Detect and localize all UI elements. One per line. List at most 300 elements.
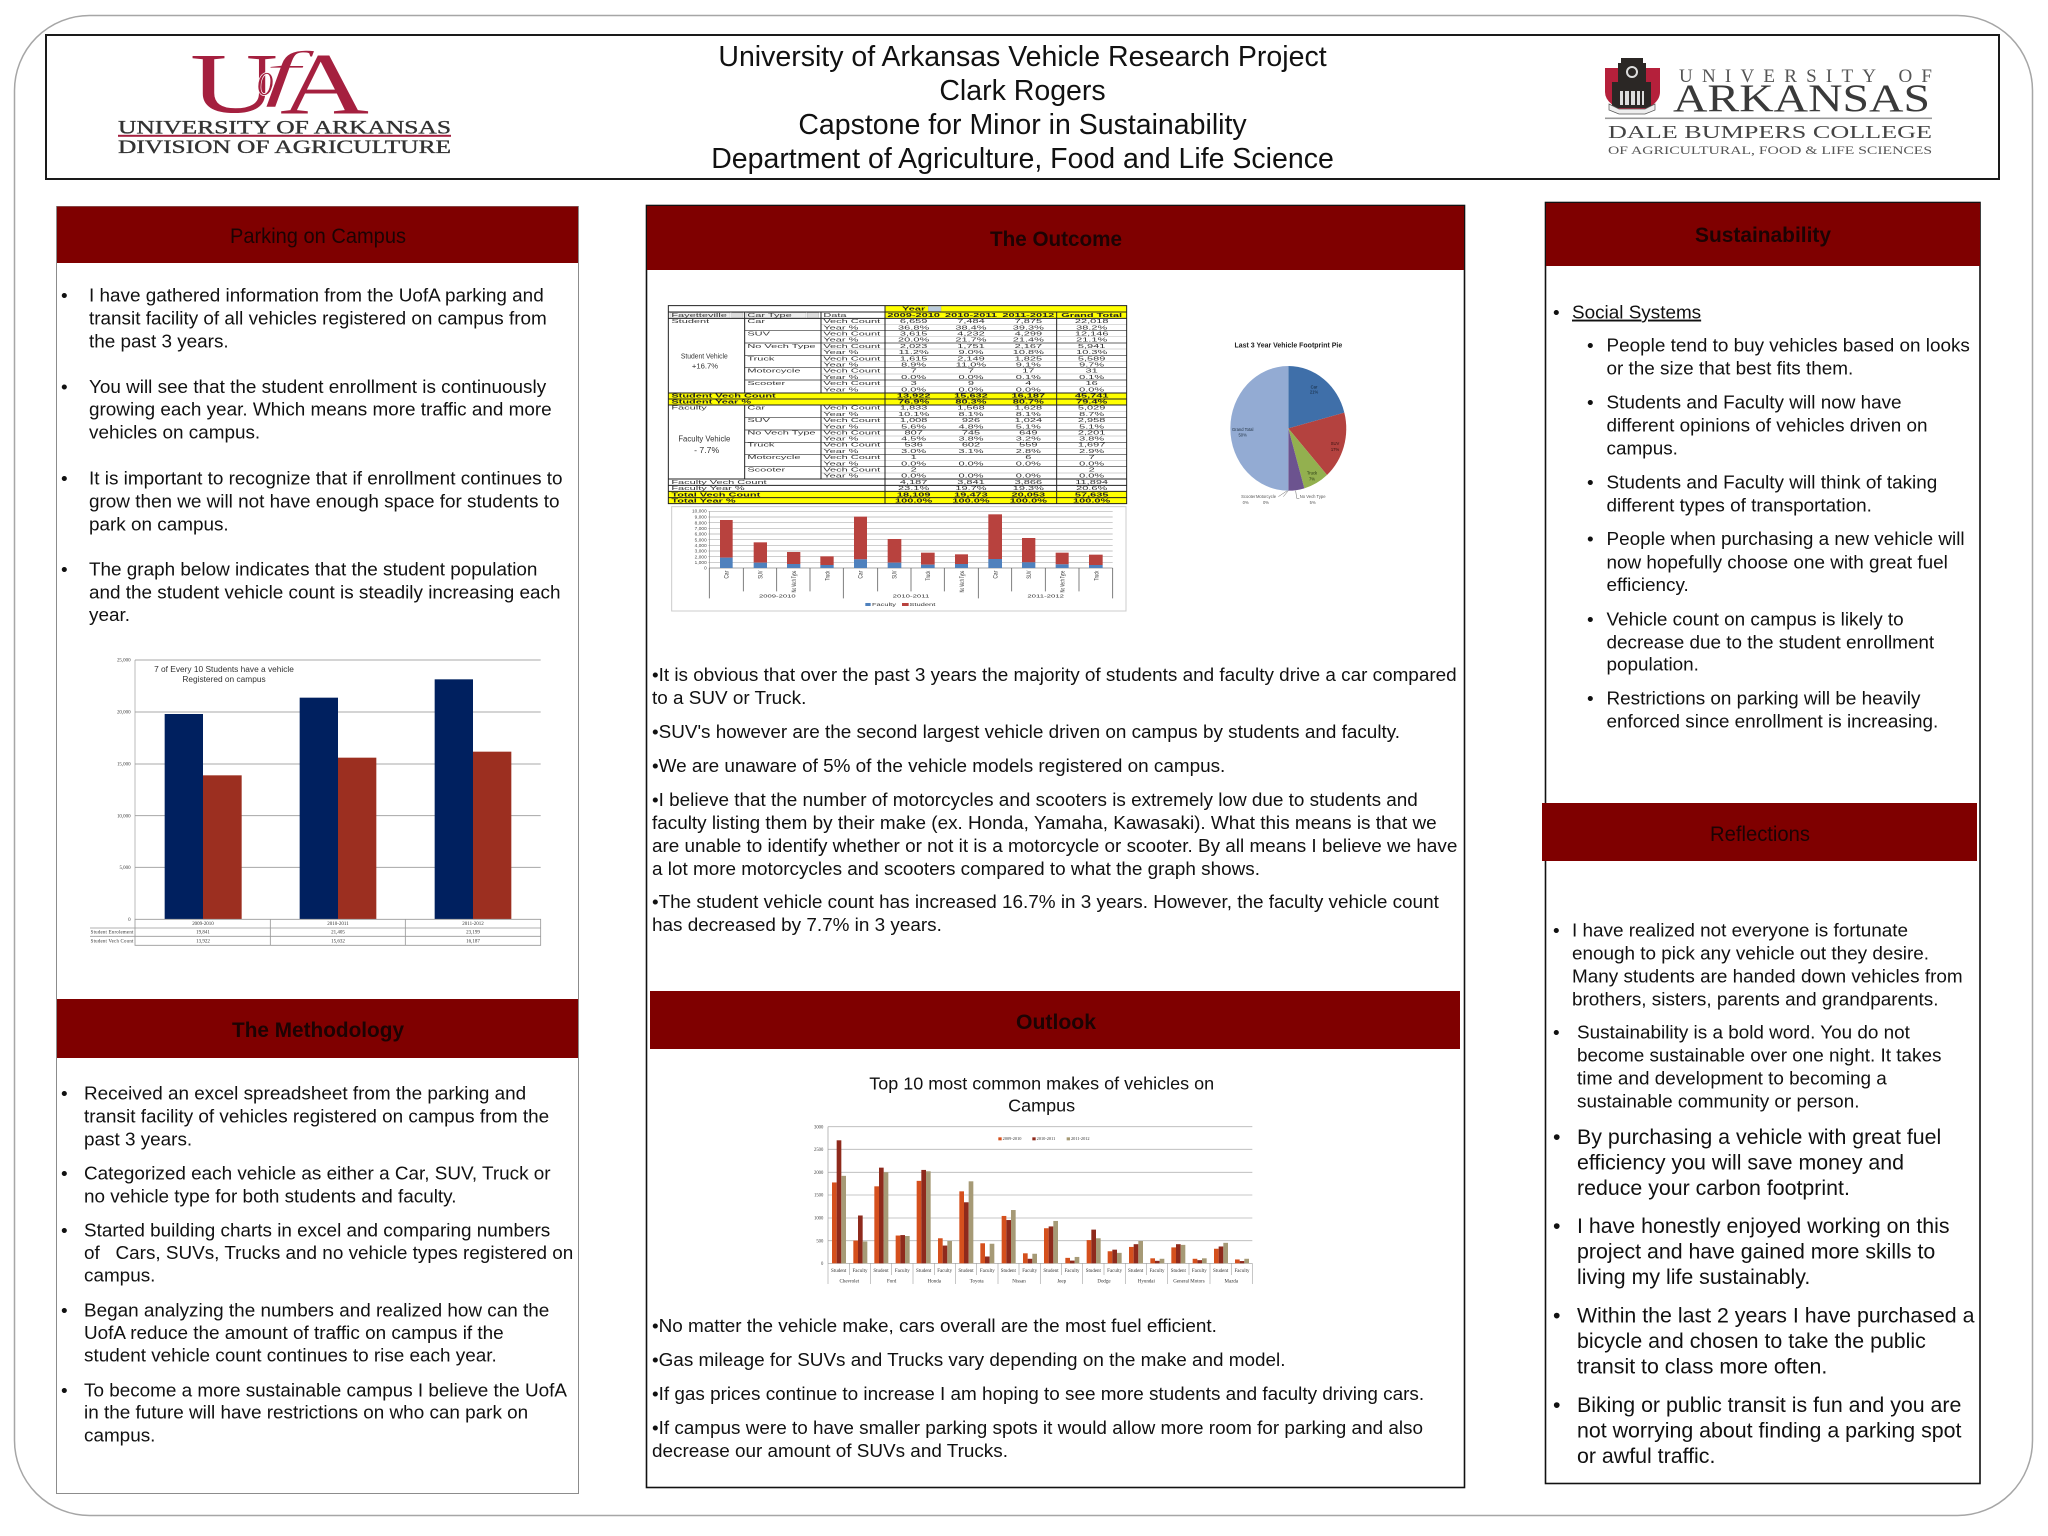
data table: vehicle counts by type and year: 39.3% [1013, 324, 1044, 331]
bar chart: student enrollment vs vehicle count: 13,922 [196, 939, 210, 944]
text block: methodology bullets: • [61, 1221, 68, 1242]
data table: vehicle counts by type and year: 11,894 [1075, 479, 1108, 485]
data table: vehicle counts by type and year: 4,232 [957, 330, 985, 337]
data table: vehicle counts by type and year: Vech Count [823, 355, 881, 362]
data table: vehicle counts by type and year: 9 [968, 380, 974, 386]
data table: vehicle counts by type and year: 0.0% [958, 386, 984, 393]
data table: vehicle counts by type and year: 23.1% [898, 485, 930, 491]
data table: vehicle counts by type and year: 1,697 [1078, 442, 1106, 448]
data table: vehicle counts by type and year: 9.7% [1079, 361, 1105, 368]
text block: reflections bullets: • [1553, 1304, 1560, 1328]
data table: vehicle counts by type and year: 0.1% [1079, 374, 1105, 380]
data table: vehicle counts by type and year: No Vech Type [747, 429, 816, 436]
bar chart: student enrollment vs vehicle count: 23,199 [466, 931, 480, 936]
data table: vehicle counts by type and year: 16,187 [1012, 392, 1045, 399]
text block: social systems bullets: different opinions of vehicles driven on [1606, 416, 1928, 437]
bar chart: top 10 vehicle makes: 1000 [814, 1217, 824, 1222]
text block: parking bullets: grow then we will not have enough space for students to [89, 492, 559, 513]
data table: vehicle counts by type and year: 31 [1086, 368, 1098, 374]
data table: vehicle counts by type and year: 1 [911, 454, 917, 460]
bar chart: top 10 vehicle makes: 1500 [814, 1194, 824, 1199]
data table: vehicle counts by type and year: Vech Count [823, 405, 881, 411]
data table: vehicle counts by type and year: 10.1% [898, 411, 930, 417]
text block: methodology bullets: transit facility of vehicles registered on campus from the [84, 1107, 549, 1128]
data table: vehicle counts by type and year: 7 [968, 368, 974, 374]
bar chart: top 10 vehicle makes: 3000 [814, 1125, 824, 1130]
text block: methodology bullets: • [61, 1301, 68, 1322]
text block: parking bullets: • [61, 469, 68, 490]
text block: social systems bullets: different types of transportation. [1606, 496, 1872, 517]
data table: vehicle counts by type and year: 0.0% [1079, 473, 1105, 479]
bar chart: student enrollment vs vehicle count: 15,632 [331, 939, 345, 944]
text block: reflections bullets: Biking or public transit is fun and you are [1577, 1393, 1961, 1417]
data table: vehicle counts by type and year: Total Vech Count [671, 491, 760, 498]
text block: reflections bullets: brothers, sisters, parents and grandparents. [1572, 990, 1938, 1011]
text block: social systems bullets: Students and Faculty will think of taking [1606, 473, 1937, 494]
data table: vehicle counts by type and year: Car [747, 318, 765, 324]
pie chart: last 3 year vehicle footprint: 0% [1243, 500, 1249, 505]
text block: social systems bullets: • [1553, 303, 1560, 324]
text block: outcome findings: are unable to identify whether or not it is a motorcycle or scooter. By all means I believe we have [652, 836, 1457, 857]
bar chart: top 10 vehicle makes: Mazda [1225, 1279, 1239, 1284]
data table: vehicle counts by type and year: 21.7% [955, 337, 987, 343]
header band [46, 35, 1999, 179]
text block: outlook points [652, 1316, 1424, 1462]
data table: vehicle counts by type and year: 7 [1089, 454, 1095, 460]
data table: vehicle counts by type and year: Truck [747, 442, 775, 448]
stacked bar chart: faculty and student vehicles by type: Faculty [872, 602, 897, 607]
logo: UofA Division of Agriculture: UNIVERSITY OF ARKANSAS [118, 118, 451, 138]
text block: reflections bullets: living my life sustainably. [1577, 1265, 1810, 1289]
bar chart: top 10 vehicle makes: Top 10 most common makes of vehicles on [869, 1073, 1214, 1093]
text block: methodology bullets: Categorized each vehicle as either a Car, SUV, Truck or [84, 1164, 551, 1185]
stacked bar chart: faculty and student vehicles by type: 2009-2010 [759, 593, 796, 598]
data table: vehicle counts by type and year: 649 [1019, 429, 1038, 436]
text block: outlook points: decrease our amount of SUVs and Trucks. [652, 1441, 1008, 1462]
logo: UofA Division of Agriculture: o [257, 53, 274, 106]
text block: social systems bullets [1553, 303, 1970, 733]
data table: vehicle counts by type and year: Faculty Vehicle [678, 434, 730, 444]
text block: reflections bullets [1553, 921, 1975, 1468]
bar chart: top 10 vehicle makes: Student [1213, 1269, 1229, 1274]
data table: vehicle counts by type and year: Year % [823, 436, 859, 442]
data table: vehicle counts by type and year: 745 [962, 429, 980, 436]
text block: social systems bullets: • [1587, 610, 1594, 631]
logo: Dale Bumpers College: UNIVERSITY OF [1679, 66, 1932, 87]
bar chart: top 10 vehicle makes: Hyundai [1138, 1279, 1156, 1284]
bar chart: top 10 vehicle makes: Faculty [1235, 1269, 1250, 1274]
data table: vehicle counts by type and year: 3 [911, 380, 917, 386]
data table: vehicle counts by type and year: 8.1% [958, 411, 984, 417]
data table: vehicle counts by type and year: 10.8% [1013, 349, 1044, 355]
data table: vehicle counts by type and year: 2,023 [900, 343, 928, 349]
text block: methodology bullets: Started building charts in excel and comparing numbers [84, 1221, 550, 1242]
data table: vehicle counts by type and year: 0.0% [1079, 460, 1105, 467]
data table: vehicle counts by type and year: 3.1% [958, 448, 984, 454]
pie chart: last 3 year vehicle footprint: SUV [1331, 441, 1339, 446]
text block: social systems bullets: decrease due to the student enrollment [1606, 633, 1935, 654]
text block: methodology bullets: • [61, 1164, 68, 1185]
text block: parking bullets: • [61, 377, 68, 398]
data table: vehicle counts by type and year: 8.7% [1079, 411, 1105, 417]
stacked bar chart: faculty and student vehicles by type: 3,000 [695, 549, 707, 554]
text block: outcome findings: •The student vehicle count has increased 16.7% in 3 years. However, the faculty vehicle count [652, 892, 1440, 913]
bar chart: student enrollment vs vehicle count: 25,000 [117, 659, 131, 664]
data table: vehicle counts by type and year: 4.5% [901, 436, 927, 442]
text block: reflections bullets: not worrying about finding a parking spot [1577, 1418, 1961, 1442]
data table: vehicle counts by type and year: 20.6% [1076, 485, 1108, 491]
data table: vehicle counts by type and year: 5,941 [1078, 343, 1106, 349]
stacked bar chart: faculty and student vehicles by type: 10,000 [692, 509, 707, 514]
data table: vehicle counts by type and year: Data [823, 312, 847, 318]
data table: vehicle counts by type and year: 2.9% [1079, 448, 1105, 454]
text block: methodology bullets: Received an excel spreadsheet from the parking and [84, 1084, 526, 1105]
bar chart: top 10 vehicle makes: 2000 [814, 1171, 824, 1176]
data table: vehicle counts by type and year: Student Vehicle [681, 351, 728, 360]
pie chart: last 3 year vehicle footprint: No Vech Type [1300, 494, 1326, 499]
bar chart: top 10 vehicle makes: Faculty [1065, 1269, 1080, 1274]
data table: vehicle counts by type and year: 21.4% [1013, 337, 1044, 343]
data table: vehicle counts by type and year: 5.6% [901, 423, 927, 430]
bar chart: student enrollment vs vehicle count [90, 659, 541, 945]
data table: vehicle counts by type and year: 12,146 [1075, 330, 1109, 337]
data table: vehicle counts by type and year: 4.8% [958, 423, 984, 430]
text block: social systems bullets: campus. [1606, 439, 1678, 460]
text block: methodology bullets [61, 1084, 573, 1447]
text block: social systems bullets: Restrictions on parking will be heavily [1606, 689, 1921, 710]
data table: vehicle counts by type and year: 2 [1089, 466, 1095, 473]
pie chart: last 3 year vehicle footprint: Truck [1307, 470, 1318, 475]
stacked bar chart: faculty and student vehicles by type: 1,000 [695, 560, 707, 565]
logo: UofA Division of Agriculture: DIVISION OF AGRICULTURE [118, 138, 451, 158]
data table: vehicle counts by type and year: Year % [823, 448, 859, 454]
data table: vehicle counts by type and year: Faculty Year % [671, 485, 745, 491]
pie chart: last 3 year vehicle footprint: Scooter [1241, 494, 1256, 499]
text block: outlook points: •If gas prices continue to increase I am hoping to see more students and faculty driving cars. [652, 1384, 1424, 1405]
text block: reflections bullets: Sustainability is a bold word. You do not [1577, 1023, 1911, 1044]
bar chart: top 10 vehicle makes: Student [1128, 1269, 1144, 1274]
bar chart: student enrollment vs vehicle count: Student Enrolement [91, 931, 134, 936]
stacked bar chart: faculty and student vehicles by type: SUV [758, 570, 765, 579]
data table: vehicle counts by type and year: Year % [823, 374, 859, 380]
data table: vehicle counts by type and year: 2,958 [1078, 417, 1106, 423]
text block: methodology bullets: in the future will have restrictions on who can park on [84, 1403, 528, 1424]
data table: vehicle counts by type and year: 8.9% [901, 361, 927, 368]
data table: vehicle counts by type and year: Vech Count [823, 417, 881, 423]
data table: vehicle counts by type and year: 21.1% [1076, 337, 1108, 343]
title block: University of Arkansas Vehicle Research Project [718, 41, 1327, 73]
text block: social systems bullets: • [1587, 473, 1594, 494]
stacked bar chart: faculty and student vehicles by type: 4,000 [695, 543, 707, 548]
stacked bar chart: faculty and student vehicles by type: 8,000 [695, 520, 707, 525]
bar chart: top 10 vehicle makes: Student [1171, 1269, 1187, 1274]
text block: reflections bullets: reduce your carbon footprint. [1577, 1176, 1850, 1200]
stacked bar chart: faculty and student vehicles by type [672, 507, 1126, 611]
logo: UofA Division of Agriculture [118, 35, 451, 158]
stacked bar chart: faculty and student vehicles by type: Truck [1093, 570, 1100, 581]
data table: vehicle counts by type and year: +16.7% [692, 361, 718, 370]
data table: vehicle counts by type and year: 100.0% [895, 497, 933, 504]
text block: outcome findings: •I believe that the number of motorcycles and scooters is extremely low due to students and [652, 790, 1418, 811]
bar chart: top 10 vehicle makes: Student [873, 1269, 889, 1274]
heading: The Outcome [647, 206, 1464, 270]
data table: vehicle counts by type and year: 0.0% [901, 386, 927, 393]
text block: reflections bullets: • [1553, 1214, 1560, 1238]
title block [711, 41, 1334, 175]
data table: vehicle counts by type and year: Year % [823, 349, 859, 355]
bar chart: top 10 vehicle makes: Ford [887, 1279, 897, 1284]
heading: Parking on Campus: Parking on Campus [230, 224, 406, 248]
data table: vehicle counts by type and year: 3.0% [901, 448, 927, 454]
data table: vehicle counts by type and year: Motorcycle [747, 368, 801, 374]
bar chart: student enrollment vs vehicle count: Registered on campus [182, 674, 266, 684]
text block: outcome findings: •SUV's however are the second largest vehicle driven on campus by students and faculty. [652, 722, 1400, 743]
text block: reflections bullets: efficiency you will save money and [1577, 1150, 1904, 1174]
data table: vehicle counts by type and year: Student [671, 318, 710, 324]
text block: parking bullets: • [61, 560, 68, 581]
text block: reflections bullets: I have realized not everyone is fortunate [1572, 921, 1908, 942]
text block: outlook points: •If campus were to have smaller parking spots it would allow more room for parking and also [652, 1418, 1423, 1439]
text block: social systems bullets: Vehicle count on campus is likely to [1606, 610, 1904, 631]
text block: parking bullets: I have gathered information from the UofA parking and [89, 286, 544, 307]
text block: parking bullets: park on campus. [89, 515, 229, 536]
text block: parking bullets: The graph below indicates that the student population [89, 560, 537, 581]
logo: Dale Bumpers College [1605, 58, 1932, 157]
data table: vehicle counts by type and year: 76.9% [898, 398, 930, 405]
data table: vehicle counts by type and year: Student Year % [671, 398, 751, 405]
data table: vehicle counts by type and year: 2 [911, 466, 917, 473]
bar chart: student enrollment vs vehicle count: 2011-2012 [462, 922, 484, 927]
data table: vehicle counts by type and year: 79.4% [1076, 398, 1108, 405]
data table: vehicle counts by type and year: 16 [1086, 380, 1098, 386]
stacked bar chart: faculty and student vehicles by type: 0 [704, 566, 707, 571]
data table: vehicle counts by type and year: 5.1% [1016, 423, 1041, 430]
text block: methodology bullets: • [61, 1084, 68, 1105]
bar chart: top 10 vehicle makes: Faculty [853, 1269, 868, 1274]
bar chart: top 10 vehicle makes: Student [1043, 1269, 1059, 1274]
heading: The Methodology [57, 999, 578, 1058]
heading: The Outcome: The Outcome [990, 227, 1122, 251]
data table: vehicle counts by type and year: 5.1% [1079, 423, 1105, 430]
bar chart: top 10 vehicle makes: Faculty [895, 1269, 910, 1274]
data table: vehicle counts by type and year: Vech Count [823, 380, 881, 386]
panel: right column (Sustainability and Reflections) [1542, 202, 1980, 1484]
data table: vehicle counts by type and year: 17 [1022, 368, 1035, 374]
heading: Sustainability: Sustainability [1695, 223, 1831, 247]
bar chart: top 10 vehicle makes: 2010-2011 [1037, 1136, 1055, 1141]
data table: vehicle counts by type and year: 0.0% [1016, 460, 1041, 467]
bar chart: student enrollment vs vehicle count: 2009-2010 [192, 922, 214, 927]
data table: vehicle counts by type and year: 20.0% [898, 337, 930, 343]
text block: reflections bullets: Within the last 2 years I have purchased a [1577, 1304, 1975, 1328]
text block: methodology bullets: • [61, 1381, 68, 1402]
text block: outcome findings: •It is obvious that over the past 3 years the majority of students and faculty drive a car compared [652, 665, 1457, 686]
text block: social systems bullets: enforced since enrollment is increasing. [1606, 712, 1938, 733]
panel: middle column (Outcome and Outlook) [646, 206, 1464, 1488]
text block: social systems bullets: People tend to buy vehicles based on looks [1606, 336, 1970, 357]
heading: Parking on Campus [57, 206, 578, 263]
bar chart: top 10 vehicle makes: Jeep [1057, 1279, 1067, 1284]
data table: vehicle counts by type and year: 13,922 [897, 392, 931, 399]
bar chart: top 10 vehicle makes: Faculty [1022, 1269, 1038, 1274]
pie chart: last 3 year vehicle footprint [1230, 342, 1346, 505]
data table: vehicle counts by type and year: SUV [747, 330, 770, 337]
heading: Sustainability [1546, 203, 1980, 266]
data table: vehicle counts by type and year: 2,149 [957, 355, 985, 362]
text block: social systems bullets: efficiency. [1606, 575, 1689, 596]
text block: social systems bullets: population. [1606, 655, 1699, 676]
data table: vehicle counts by type and year: 0.0% [1079, 386, 1105, 393]
stacked bar chart: faculty and student vehicles by type: 2,000 [695, 554, 707, 559]
data table: vehicle counts by type and year: 80.7% [1013, 398, 1044, 405]
stacked bar chart: faculty and student vehicles by type: Student [909, 602, 936, 607]
data table: vehicle counts by type and year: Vech Count [823, 318, 881, 324]
pie chart: last 3 year vehicle footprint: 17% [1331, 447, 1339, 452]
text block: parking bullets: year. [89, 605, 130, 626]
data table: vehicle counts by type and year: 3,866 [1015, 479, 1042, 485]
data table: vehicle counts by type and year: Car Type [747, 312, 792, 318]
text block: parking bullets: vehicles on campus. [89, 423, 260, 444]
text block: social systems bullets: • [1587, 689, 1594, 710]
stacked bar chart: faculty and student vehicles by type: No Vech Type [959, 571, 966, 592]
data table: vehicle counts by type and year: 57,635 [1075, 491, 1109, 498]
data table: vehicle counts by type and year: 9.0% [958, 349, 984, 355]
text block: methodology bullets: of Cars, SUVs, Trucks and no vehicle types registered on [84, 1243, 573, 1264]
data table: vehicle counts by type and year: 7,875 [1015, 318, 1042, 324]
stacked bar chart: faculty and student vehicles by type: 2010-2011 [893, 593, 930, 598]
data table: vehicle counts by type and year: 15,632 [954, 392, 988, 399]
bar chart: student enrollment vs vehicle count: 20,000 [117, 711, 131, 716]
text block: reflections bullets: project and have gained more skills to [1577, 1240, 1935, 1264]
data table: vehicle counts by type and year: 100.0% [1010, 497, 1047, 504]
data table: vehicle counts by type and year: Year % [823, 361, 859, 368]
data table: vehicle counts by type and year: 4,187 [900, 479, 928, 485]
bar chart: student enrollment vs vehicle count: Student Vech Count [91, 939, 134, 944]
stacked bar chart: faculty and student vehicles by type: 7,000 [695, 526, 707, 531]
text block: parking bullets: growing each year. Which means more traffic and more [89, 400, 552, 421]
text block: social systems bullets: now hopefully choose one with great fuel [1606, 553, 1948, 574]
data table: vehicle counts by type and year: 6 [1025, 454, 1032, 460]
data table: vehicle counts by type and year: Faculty Vech Count [671, 479, 767, 485]
data table: vehicle counts by type and year: 0.0% [901, 374, 927, 380]
data table: vehicle counts by type and year: 45,741 [1075, 392, 1109, 399]
bar chart: top 10 vehicle makes: Toyota [970, 1279, 984, 1284]
text block: methodology bullets: campus. [84, 1266, 155, 1287]
heading: Outlook: Outlook [1016, 1010, 1096, 1034]
logo: Dale Bumpers College: DALE BUMPERS COLLEGE [1608, 122, 1932, 142]
data table: vehicle counts by type and year: 2011-2012 [1002, 312, 1055, 318]
data table: vehicle counts by type and year: 10.3% [1076, 349, 1108, 355]
data table: vehicle counts by type and year: 2010-2011 [945, 312, 997, 318]
data table: vehicle counts by type and year: 19.7% [955, 485, 987, 491]
title block: Department of Agriculture, Food and Life Science [711, 143, 1334, 175]
text block: outcome findings: •We are unaware of 5% of the vehicle models registered on campus. [652, 756, 1225, 777]
data table: vehicle counts by type and year: Year % [823, 337, 859, 343]
logo: Dale Bumpers College: OF AGRICULTURAL, FOOD & LIFE SCIENCES [1608, 145, 1932, 157]
text block: methodology bullets: UofA reduce the amount of traffic on campus if the [84, 1323, 504, 1344]
data table: vehicle counts by type and year: 2009-2010 [887, 312, 940, 318]
data table: vehicle counts by type and year: Year % [823, 423, 859, 430]
bar chart: top 10 vehicle makes [814, 1073, 1252, 1284]
bar chart: top 10 vehicle makes: Faculty [1192, 1269, 1207, 1274]
data table: vehicle counts by type and year: SUV [747, 417, 770, 423]
data table: vehicle counts by type and year: 0.0% [901, 473, 927, 479]
logo: UofA Division of Agriculture: f [264, 40, 316, 108]
text block: reflections bullets: • [1553, 1393, 1560, 1417]
data table: vehicle counts by type and year: 18,109 [897, 491, 931, 498]
data table: vehicle counts by type and year: Scooter [747, 380, 785, 386]
panel: left column (Parking on Campus and Methodology) [56, 206, 578, 1494]
text block: reflections bullets: or awful traffic. [1577, 1444, 1715, 1468]
pie chart: last 3 year vehicle footprint: 7% [1309, 477, 1315, 482]
text block: reflections bullets: bicycle and chosen to take the public [1577, 1329, 1926, 1353]
data table: vehicle counts by type and year: 20,053 [1012, 491, 1045, 498]
bar chart: top 10 vehicle makes: Student [958, 1269, 974, 1274]
data table: vehicle counts by type and year: 2,167 [1015, 343, 1042, 349]
stacked bar chart: faculty and student vehicles by type: 6,000 [695, 532, 707, 537]
text block: parking bullets: and the student vehicle count is steadily increasing each [89, 583, 561, 604]
data table: vehicle counts by type and year: 0.0% [958, 374, 984, 380]
pie chart: last 3 year vehicle footprint: Last 3 Year Vehicle Footprint Pie [1234, 342, 1342, 349]
data table: vehicle counts by type and year: 0.1% [1016, 374, 1041, 380]
data table: vehicle counts by type and year: 1,628 [1015, 405, 1042, 411]
text block: social systems bullets: Students and Faculty will now have [1606, 393, 1902, 414]
text block: methodology bullets: campus. [84, 1426, 155, 1447]
bar chart: top 10 vehicle makes: Faculty [1150, 1269, 1165, 1274]
bar chart: top 10 vehicle makes: 2009-2010 [1003, 1136, 1021, 1141]
data table: vehicle counts by type and year: 5,589 [1078, 355, 1106, 362]
logo: Dale Bumpers College: ARKANSAS [1673, 77, 1930, 120]
text block: reflections bullets: time and development to becoming a [1577, 1069, 1887, 1090]
data table: vehicle counts by type and year: 7,484 [957, 318, 985, 324]
bar chart: top 10 vehicle makes: Student [1001, 1269, 1017, 1274]
text block: parking bullets: the past 3 years. [89, 332, 229, 353]
data table: vehicle counts by type and year: No Vech Type [747, 343, 816, 349]
pie chart: last 3 year vehicle footprint: 21% [1310, 390, 1318, 395]
bar chart: top 10 vehicle makes: Nissan [1012, 1279, 1026, 1284]
data table: vehicle counts by type and year: 4,299 [1015, 330, 1042, 337]
data table: vehicle counts by type and year: Year % [823, 460, 859, 467]
bar chart: top 10 vehicle makes: Student [1086, 1269, 1102, 1274]
text block: reflections bullets: By purchasing a vehicle with great fuel [1577, 1125, 1941, 1149]
bar chart: top 10 vehicle makes: 500 [816, 1239, 824, 1244]
data table: vehicle counts by type and year: 7 [911, 368, 917, 374]
text block: social systems bullets: • [1587, 336, 1594, 357]
data table: vehicle counts by type and year: 0.0% [1016, 386, 1041, 393]
bar chart: student enrollment vs vehicle count: 21,405 [331, 931, 345, 936]
pie chart: last 3 year vehicle footprint: 0% [1263, 500, 1269, 505]
logo: UofA Division of Agriculture: U [190, 35, 278, 131]
data table: vehicle counts by type and year: 6,659 [900, 318, 928, 324]
bar chart: student enrollment vs vehicle count: 5,000 [119, 866, 131, 871]
data table: vehicle counts by type and year: 807 [904, 429, 923, 436]
text block: reflections bullets: transit to class more often. [1577, 1354, 1827, 1378]
bar chart: student enrollment vs vehicle count: 19,841 [196, 931, 210, 936]
data table: vehicle counts by type and year: 1,825 [1015, 355, 1042, 362]
logo: UofA Division of Agriculture: A [280, 36, 369, 134]
text block: reflections bullets: sustainable community or person. [1577, 1092, 1859, 1113]
data table: vehicle counts by type and year: Student Vech Count [671, 392, 776, 399]
stacked bar chart: faculty and student vehicles by type: Car [724, 570, 731, 579]
text block: outcome findings: to a SUV or Truck. [652, 688, 806, 709]
bar chart: student enrollment vs vehicle count: 2010-2011 [327, 922, 349, 927]
bar chart: top 10 vehicle makes: Campus [1008, 1096, 1075, 1116]
heading: Outlook [650, 991, 1460, 1049]
data table: vehicle counts by type and year: 11.0% [956, 361, 987, 368]
data table: vehicle counts by type and year: Fayetteville [671, 312, 727, 318]
data table: vehicle counts by type and year: Vech Count [823, 454, 881, 460]
heading: The Methodology: The Methodology [232, 1018, 404, 1042]
